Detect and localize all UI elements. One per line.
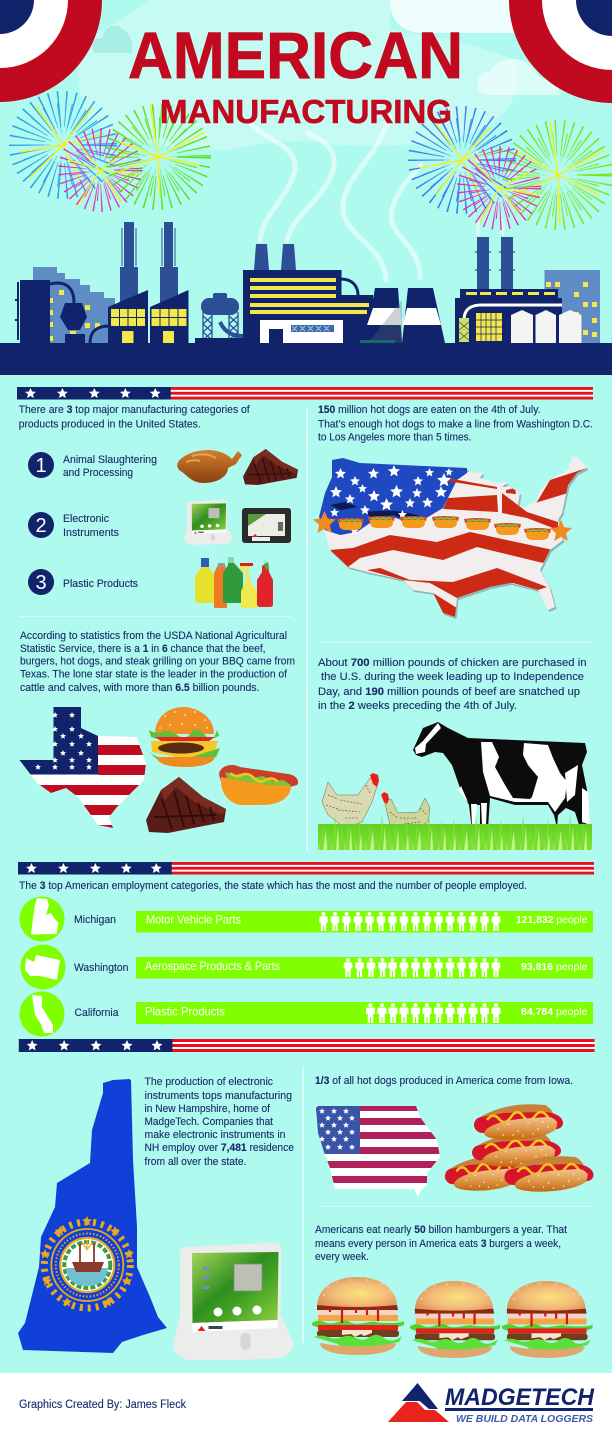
category 3: Plastic Products	[63, 578, 139, 590]
panel: New Hampshire	[18, 1076, 294, 1360]
New Hampshire text: make electronic instruments in	[144, 1129, 286, 1141]
hamburger text: Americans eat nearly 50 billon hamburgers a year. That	[315, 1224, 567, 1236]
water tower	[195, 293, 244, 343]
category 1	[28, 452, 157, 479]
employment intro text: The 3 top American employment categories, the state which has the most and the number of people employed.	[19, 880, 527, 892]
clouds	[79, 0, 560, 150]
hot dog fact text	[318, 404, 593, 444]
row: California: California	[74, 1007, 118, 1019]
category 2: Electronic	[63, 513, 110, 525]
flag divider 2	[18, 862, 594, 874]
intro text: There are 3 top major manufacturing categories of	[19, 404, 251, 416]
panel: employment	[19, 880, 593, 1036]
icon: hen right	[381, 792, 430, 830]
New Hampshire text: NH employ over 7,481 residence	[144, 1142, 294, 1154]
factory skyline	[0, 222, 612, 375]
hot dog fact text: 150 million hot dogs are eaten on the 4th of July.	[318, 404, 540, 416]
New Hampshire text: in New Hampshire, home of	[144, 1103, 271, 1115]
hamburger text: means every person in America eats 3 burgers a week,	[315, 1238, 561, 1250]
row of hot dogs	[337, 516, 551, 540]
panel: Iowa hot dogs	[310, 1075, 594, 1358]
intro text	[19, 404, 251, 430]
icon: white data logger	[184, 500, 232, 545]
Texas text: Texas. The lone star state is the leader in the production of	[20, 668, 288, 680]
main factory	[243, 244, 373, 343]
category 2: 2	[35, 515, 47, 537]
map: US flag	[319, 457, 588, 619]
category 1: Animal Slaughtering	[63, 454, 157, 466]
New Hampshire text	[144, 1076, 294, 1168]
hot dog fact text: to Los Angeles more than 5 times.	[318, 432, 472, 444]
row: Michigan: Motor Vehicle Parts	[146, 912, 241, 926]
chicken and beef text: Day, and 190 million pounds of beef are snatched up	[318, 686, 580, 698]
icon: plastic bottles	[195, 557, 273, 608]
Texas text: According to statistics from the USDA National Agricultural	[20, 630, 287, 642]
Texas text	[20, 630, 295, 694]
building: sawtooth factories	[90, 290, 188, 343]
New Hampshire text: The production of electronic	[144, 1076, 274, 1088]
panel: Texas	[15, 630, 298, 833]
icon: hen left	[322, 773, 379, 828]
category 1: 1	[35, 455, 47, 477]
credit text: Graphics Created By: James Fleck	[19, 1399, 186, 1411]
title: MANUFACTURING	[160, 93, 452, 130]
fireworks left	[20, 103, 205, 205]
flag divider 1	[17, 387, 593, 400]
footer	[0, 1373, 612, 1440]
chicken and beef text: in the 2 weeks preceding the 4th of July.	[318, 700, 517, 712]
icon: steak	[243, 449, 298, 485]
fireworks right	[420, 122, 604, 225]
ribbon: left	[0, 0, 102, 102]
ribbon: right	[509, 0, 612, 103]
chicken and beef text: About 700 million pounds of chicken are purchased in	[318, 657, 586, 669]
row: California	[20, 992, 593, 1036]
icon: data logger device	[172, 1243, 294, 1360]
icon: three hamburgers	[312, 1277, 592, 1358]
right factory	[455, 237, 600, 343]
category 3: 3	[35, 572, 47, 594]
smoke plumes	[125, 117, 503, 280]
row: Washington	[20, 944, 593, 990]
flag divider 3	[19, 1039, 595, 1052]
icon: hot dog pile	[445, 1104, 594, 1192]
row: Michigan: Michigan	[74, 914, 116, 926]
chicken and beef text: the U.S. during the week leading up to Independence	[321, 671, 584, 683]
ground strip	[0, 343, 612, 375]
category 2: Instruments	[63, 527, 120, 539]
row: Washington: Washington	[74, 962, 128, 974]
map: Texas flag	[20, 707, 146, 828]
icon: cheeseburger	[149, 707, 220, 767]
MadgeTech logo	[388, 1383, 595, 1425]
header illustration	[0, 0, 612, 375]
MadgeTech logo: WE BUILD DATA LOGGERS	[456, 1414, 593, 1425]
row: California: 84,784 people	[521, 1006, 588, 1018]
panel dividers	[20, 408, 592, 1343]
title	[128, 18, 463, 130]
New Hampshire text: from all over the state.	[144, 1156, 246, 1168]
MadgeTech logo: MADGETECH	[445, 1384, 595, 1411]
category 1: and Processing	[63, 467, 133, 479]
map: New Hampshire	[18, 1079, 167, 1353]
icon: end star	[550, 520, 572, 541]
panel: hot dogs line	[310, 404, 595, 625]
Texas text: cattle and calves, with more than 6.5 billion pounds.	[20, 682, 260, 694]
panel: chicken and beef	[318, 657, 592, 850]
intro text: products produced in the United States.	[19, 418, 201, 430]
row: California: Plastic Products	[145, 1004, 225, 1018]
row: Michigan: 121,832 people	[516, 914, 588, 926]
panel: top categories	[19, 404, 298, 608]
icon: roast chicken	[177, 450, 242, 483]
icon: start star	[313, 511, 336, 533]
cooling towers	[360, 288, 445, 343]
category 3	[28, 569, 139, 595]
Texas text: burgers, hot dogs, and steak grilling on your BBQ came from	[20, 656, 295, 668]
icon: black data logger	[242, 508, 291, 543]
title: AMERICAN	[128, 18, 463, 92]
category 2	[28, 512, 120, 539]
Iowa text: 1/3 of all hot dogs produced in America come from Iowa.	[315, 1075, 573, 1087]
chimneys: left pair	[120, 222, 178, 307]
New Hampshire text: MadgeTech. Companies that	[144, 1116, 273, 1128]
row: Washington: Aerospace Products & Parts	[145, 959, 280, 973]
state seal	[40, 1216, 134, 1308]
icon: cow	[413, 722, 590, 830]
grass	[318, 810, 592, 850]
row: Washington: 93,816 people	[521, 961, 588, 973]
hot dog fact text: That’s enough hot dogs to make a line from Washington D.C.	[318, 418, 593, 430]
hamburger text: every week.	[315, 1251, 369, 1263]
map: Iowa flag	[316, 1106, 440, 1197]
Texas text: Statistic Service, there is a 1 in 6 chance that the beef,	[20, 643, 266, 655]
hamburger text	[315, 1224, 567, 1263]
building: stepped blue left	[33, 267, 115, 343]
row: Michigan	[20, 896, 593, 942]
icon: steak	[146, 777, 226, 833]
building: left silo with hopper	[15, 280, 87, 343]
icon: hot dog	[219, 765, 298, 805]
chicken and beef text	[318, 657, 586, 712]
New Hampshire text: instruments tops manufacturing	[144, 1090, 292, 1102]
